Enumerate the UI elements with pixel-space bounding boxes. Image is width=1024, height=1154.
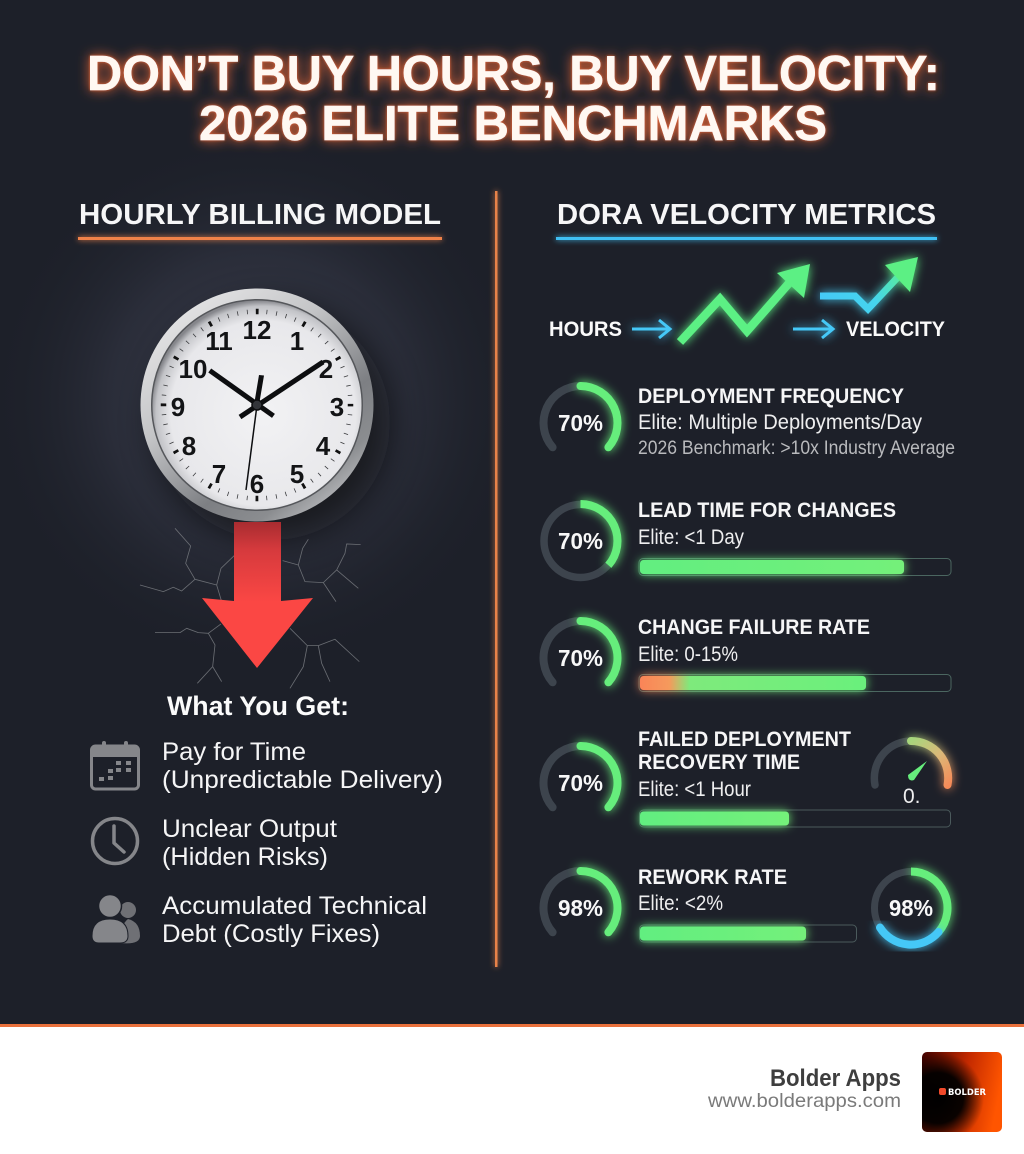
clock numerals: 2 (319, 354, 333, 384)
metric: failed deployment recovery time (544, 728, 950, 827)
cracks in wall (140, 528, 361, 688)
title: 2026 ELITE BENCHMARKS (199, 97, 827, 151)
footer (0, 1024, 1024, 1154)
icon: clock outline (92, 818, 138, 864)
icon: calendar (91, 741, 139, 789)
center divider (495, 191, 498, 967)
metric: rework rate (544, 866, 948, 945)
list item: unclear output: Unclear Output (162, 815, 337, 843)
progress ring 70% (544, 746, 617, 807)
clock numerals: 10 (179, 354, 207, 384)
progress bar (640, 925, 856, 942)
list item: technical debt (92, 892, 427, 948)
metric: lead time for changes: LEAD TIME FOR CHANGES (638, 499, 896, 522)
progress ring 70% (544, 504, 617, 578)
metric: failed deployment recovery time: FAILED DEPLOYMENT (638, 728, 851, 751)
clock numerals: 12 (243, 315, 271, 345)
metric: lead time for changes (544, 499, 951, 578)
arrow: hours (632, 320, 670, 338)
clock hands (208, 362, 323, 490)
metric: deployment frequency: 2026 Benchmark: >10x Industry Average (638, 438, 955, 459)
list item: unclear output: (Hidden Risks) (162, 843, 328, 871)
red down arrow (202, 522, 313, 668)
progress ring 98%: 98% (558, 895, 603, 921)
metric: change failure rate (544, 616, 951, 692)
progress bar (639, 674, 951, 692)
arrow: velocity (793, 320, 833, 338)
clock numerals: 11 (205, 326, 233, 356)
arrow: blue green trend (820, 257, 918, 309)
list item: pay for time: (Unpredictable Delivery) (162, 766, 443, 794)
title (87, 47, 940, 151)
donut 98% (874, 872, 948, 945)
metric: rework rate: Elite: <2% (638, 892, 723, 915)
metric: rework rate: REWORK RATE (638, 866, 787, 889)
progress ring 70% (544, 621, 617, 682)
progress ring 70%: 70% (558, 528, 603, 554)
clock numerals: 6 (250, 469, 264, 499)
gauge: 0. (903, 785, 921, 808)
title: DON’T BUY HOURS, BUY VELOCITY: (87, 47, 940, 101)
footer brand name: Bolder Apps (770, 1065, 901, 1092)
heading: hourly billing model: HOURLY BILLING MODEL (79, 199, 441, 231)
metric: deployment frequency: Elite: Multiple Deployments/Day (638, 411, 922, 434)
list item: technical debt: Accumulated Technical (162, 892, 427, 920)
progress ring 70% (544, 386, 617, 447)
list item: pay for time (91, 738, 443, 794)
footer url: www.bolderapps.com (707, 1090, 901, 1112)
progress bar (639, 558, 951, 576)
clock numerals: 8 (182, 431, 196, 461)
clock numerals (171, 315, 344, 499)
metric: failed deployment recovery time: RECOVERY TIME (638, 751, 800, 774)
metric: deployment frequency (544, 385, 955, 459)
progress ring 70%: 70% (558, 645, 603, 671)
clock numerals: 1 (290, 326, 304, 356)
progress bar (640, 810, 950, 827)
progress ring 98% (544, 871, 617, 932)
list item: pay for time: Pay for Time (162, 738, 306, 766)
heading: what you get: What You Get: (167, 691, 349, 721)
clock numerals: 5 (290, 459, 304, 489)
metric: change failure rate: Elite: 0-15% (638, 643, 738, 666)
hours to velocity trend graphic (549, 257, 945, 342)
progress ring 70%: 70% (558, 770, 603, 796)
clock numerals: 7 (212, 459, 226, 489)
metric: failed deployment recovery time: Elite: <1 Hour (638, 778, 751, 801)
icon: people (92, 894, 140, 943)
metric: deployment frequency: DEPLOYMENT FREQUENCY (638, 385, 904, 408)
list item: unclear output (92, 815, 337, 871)
gauge (874, 741, 948, 808)
icon: wall clock (140, 288, 390, 540)
progress ring 70%: 70% (558, 410, 603, 436)
hours to velocity trend graphic: VELOCITY (846, 318, 945, 341)
clock backdrop glow (0, 130, 527, 670)
metric: change failure rate: CHANGE FAILURE RATE (638, 616, 870, 639)
list item: technical debt: Debt (Costly Fixes) (162, 920, 380, 948)
heading: dora velocity metrics: DORA VELOCITY METRICS (557, 199, 936, 231)
donut 98%: 98% (889, 895, 933, 921)
logo: BOLDER (948, 1088, 986, 1098)
clock numerals: 3 (330, 392, 344, 422)
metric: lead time for changes: Elite: <1 Day (638, 526, 744, 549)
clock numerals: 9 (171, 392, 185, 422)
arrow: green zigzag trend (680, 264, 810, 342)
clock numerals: 4 (316, 431, 331, 461)
hours to velocity trend graphic: HOURS (549, 318, 622, 341)
logo (922, 1052, 1002, 1132)
